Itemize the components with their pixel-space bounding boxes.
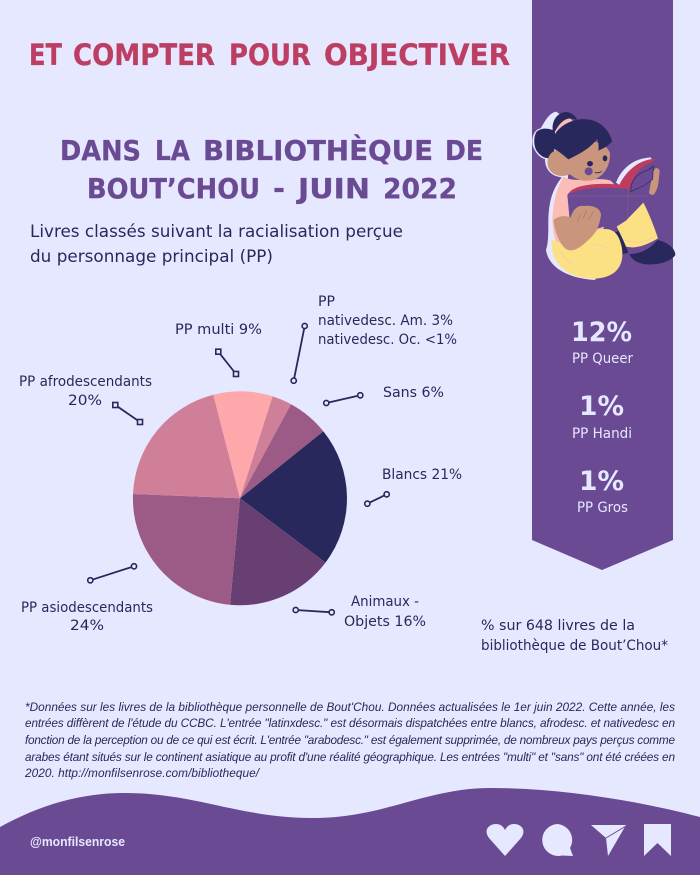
connector: asiodescendants (88, 564, 137, 583)
connector: blancs (365, 492, 389, 506)
side ribbon (532, 0, 673, 570)
label: animaux: Objets 16% (344, 614, 426, 630)
heading: BOUT’CHOU (87, 172, 260, 205)
label: asiodescendants: PP asiodescendants (21, 600, 153, 616)
connector: nativedesc (291, 323, 307, 383)
label: animaux (344, 594, 426, 630)
book (567, 159, 655, 230)
far hand (646, 168, 660, 195)
icon: bookmark (644, 824, 671, 856)
raised leg (617, 203, 658, 247)
label: asiodescendants: 24% (70, 618, 104, 634)
stat: queer: 12% (571, 317, 632, 348)
label: afrodescendants: PP afrodescendants (19, 374, 152, 390)
footnote: fonction de la perception ou de ce qui est écrit. L'entrée "arabodesc." est également supprimée, de nombreux pays perçus comme (25, 733, 675, 747)
label: nativedesc: PP (318, 294, 335, 310)
subtitle: du personnage principal (PP) (30, 247, 273, 266)
book spine (568, 159, 655, 194)
footer wave (0, 788, 700, 875)
icon: speech bubble (542, 824, 573, 856)
illustration: child reading (532, 112, 675, 280)
label: multi: PP multi 9% (175, 322, 262, 338)
footnote: 2020. http://monfilsenrose.com/bibliotheque/ (24, 766, 261, 780)
note: sample size: bibliothèque de Bout’Chou* (481, 638, 668, 654)
connector: sans (324, 393, 363, 406)
heading: DE (445, 134, 483, 167)
heading: 2022 (383, 172, 457, 205)
label: afrodescendants: 20% (68, 393, 102, 409)
slice: Animaux 16% (230, 498, 326, 605)
stat: queer (571, 317, 633, 367)
pants (552, 229, 622, 279)
stat: handi: 1% (579, 391, 624, 422)
stat: gros: 1% (579, 466, 624, 497)
shirt (553, 177, 620, 243)
note: sample size: % sur 648 livres de la (481, 618, 635, 634)
heading: JUIN (296, 172, 370, 205)
stat: gros: PP Gros (577, 500, 628, 516)
label: nativedesc: nativedesc. Am. 3% (318, 313, 453, 329)
note: sample size (481, 618, 668, 654)
icon: heart (487, 824, 523, 856)
arm and hand (553, 206, 601, 250)
cheek (585, 167, 593, 175)
connector: animaux (293, 607, 334, 615)
title (29, 38, 510, 72)
back heel (611, 231, 628, 255)
pie chart (133, 391, 347, 605)
slice: sans 6% (240, 404, 323, 498)
heading: BIBLIOTHÈQUE (203, 133, 433, 167)
fingers (577, 210, 593, 222)
label: blancs: Blancs 21% (382, 467, 462, 483)
footer handle: @monfilsenrose (30, 834, 125, 849)
connector: multi (216, 349, 238, 376)
stat: queer: PP Queer (572, 351, 633, 367)
heading: DANS (60, 134, 141, 167)
heading: - (273, 172, 285, 205)
footnote: arabes étant situés sur le continent asiatique au profit d'une réalité géographique. Les entrées "multi" et "sans" ont été créées en (25, 750, 675, 764)
title: POUR (229, 38, 311, 72)
mouth (595, 171, 602, 173)
outline (532, 112, 653, 280)
slice: Blancs 21% (240, 431, 347, 563)
label: sans: Sans 6% (383, 385, 444, 401)
book fold line (567, 189, 648, 218)
face (562, 141, 610, 181)
footnote: *Données sur les livres de la bibliothèque personnelle de Bout'Chou. Données actualisées le 1er juin 2022. Cette année, les (25, 700, 675, 714)
stat: handi (572, 391, 632, 442)
shoe (629, 240, 675, 264)
hair tie (553, 116, 573, 132)
slice: asiodescendants 24% (133, 494, 240, 605)
subtitle: Livres classés suivant la racialisation perçue (30, 222, 403, 241)
label: nativedesc (318, 294, 457, 348)
label: animaux: Animaux - (351, 594, 419, 610)
ear (547, 150, 572, 176)
slice: nativedesc 3% (240, 396, 291, 498)
title: OBJECTIVER (324, 38, 510, 72)
label: asiodescendants (21, 600, 153, 634)
pants creases (559, 235, 657, 265)
heading (60, 133, 483, 205)
footnote: entrées diffèrent de l'étude du CCBC. L'entrée "latinxdesc." est désormais dispatchées entre blancs, afrodesc. et nativedesc en (25, 716, 675, 730)
title: COMPTER (73, 38, 215, 72)
eyes (587, 155, 607, 166)
slice: multi 9% (213, 391, 273, 498)
hair (553, 119, 612, 159)
footnote (24, 700, 675, 780)
connector: afrodescendants (113, 402, 142, 424)
label: nativedesc: nativedesc. Oc. <1% (318, 332, 457, 348)
label: afrodescendants (19, 374, 152, 409)
book page scribble (631, 166, 653, 192)
subtitle (30, 222, 403, 266)
stat: handi: PP Handi (572, 426, 632, 442)
title: ET (29, 38, 62, 72)
heading: LA (155, 134, 190, 167)
slice: afrodescendants 20% (133, 395, 240, 498)
stat: gros (577, 466, 628, 516)
icon: paper plane (591, 825, 626, 856)
bun (534, 112, 577, 158)
